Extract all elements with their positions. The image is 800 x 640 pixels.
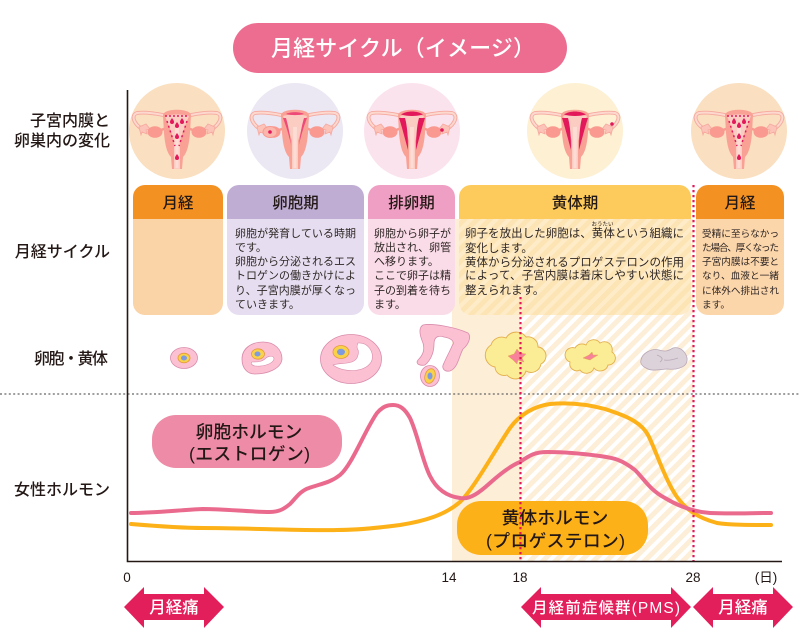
arrow: menstrual pain, end: 月経痛 [718,598,768,617]
red dotted marker: day 28 [692,185,695,561]
hormone label: progesterone: (プロゲステロン) [486,531,625,551]
panel: luteal phase: 整えられます。 [465,283,544,297]
panel: luteal phase: 卵子を放出した卵胞は、黄体という組織に [465,226,684,240]
panel: menstruation, end of cycle: 月経 [724,194,756,212]
panel: ovulation: ます。 [374,298,406,311]
hormone label: estrogen: 卵胞ホルモン [196,422,302,442]
axis labels: days: 18 [512,570,528,585]
panel: luteal phase: 変化します。 [465,242,533,255]
panel: menstruation, end of cycle: ます。 [702,299,730,311]
panel: luteal phase: 黄体から分泌されるプロゲステロンの作用 [465,255,684,269]
panel: follicular phase: トロゲンの働きかけによ [235,269,356,282]
icon: corpus albicans [641,348,687,370]
arrow: menstrual pain, start: 月経痛 [149,598,199,617]
panel: ovulation: へ移ります。 [374,254,439,268]
panel: luteal phase: 黄体期 [552,194,598,212]
icon: uterus, follicular phase [247,83,343,179]
row label: uterus and ovary changes: 卵巣内の変化 [14,132,110,150]
axis labels: days: (日) [755,570,777,585]
title: 月経サイクル（イメージ） [271,36,535,61]
hormone label: estrogen: (エストロゲン) [189,444,310,464]
panel: ovulation: 子の到着を待ち [374,283,451,297]
arrow: menstrual pain, start [124,587,224,628]
row label: menstrual cycle: 月経サイクル [15,243,110,261]
red dotted marker: day 18 [519,297,522,561]
panel: menstruation, end of cycle [696,185,784,315]
title [233,23,567,73]
panel: follicular phase: 卵胞期 [272,194,319,212]
panel: ovulation: 排卵期 [388,194,435,212]
panel: menstruation, end of cycle: に体外へ排出され [702,284,779,297]
icon: uterus, menstruation [129,83,225,179]
icon: corpus luteum, shrinking [565,340,615,373]
row label: female hormones: 女性ホルモン [14,481,110,499]
grey dotted separator [0,393,800,395]
icon: ovulating follicle [417,324,470,386]
hormone label: progesterone [457,501,648,555]
panel: follicular phase: り、子宮内膜が厚くなっ [235,283,356,297]
panel: menstruation [133,185,223,315]
chart axes [128,90,782,562]
panel: ovulation [368,185,455,315]
shaded luteal background band [452,219,693,561]
panel: menstruation, end of cycle: なり、血液と一緒 [702,269,779,282]
axis labels: days: 14 [441,570,457,585]
panel: luteal phase: おうたい [591,221,614,228]
line chart: estrogen curve [131,405,771,513]
hormone label: estrogen [152,415,342,468]
row label: follicle and corpus luteum: 卵胞・黄体 [34,350,108,368]
panel: menstruation, end of cycle: た場合、厚くなった [702,241,779,254]
icon: uterus, ovulation [364,83,460,179]
row label: uterus and ovary changes: 子宮内膜と [30,112,110,130]
panel: menstruation, end of cycle: 受精に至らなかっ [702,227,779,240]
panel: luteal phase: によって、子宮内膜は着床しやすい状態に [465,268,684,282]
icon: mature follicle [320,334,382,384]
panel: follicular phase: 卵胞から分泌されるエス [235,254,356,268]
row label: uterus and ovary changes [14,112,110,150]
icon: uterus, luteal phase [527,83,623,179]
icon: growing follicle [242,342,282,374]
panel: luteal phase [459,185,691,315]
panel: follicular phase: 卵胞が発育している時期 [235,226,356,240]
hormone label: progesterone: 黄体ホルモン [502,508,608,528]
icon: uterus, menstruation again [691,83,787,179]
panel: follicular phase: ていきます。 [235,298,300,311]
axis labels: days: 0 [123,570,131,585]
panel: ovulation: 放出され、卵管 [374,240,451,254]
panel: ovulation: 卵胞から卵子が [374,226,451,240]
icon: corpus luteum, large [485,332,546,379]
arrow: premenstrual syndrome: 月経前症候群(PMS) [532,599,680,617]
arrow: menstrual pain, end [693,587,793,628]
icon: small follicle [170,348,198,368]
axis labels: days: 28 [685,570,701,585]
panel: menstruation, end of cycle: 子宮内膜は不要と [702,255,779,268]
panel: follicular phase [227,185,364,315]
line chart: progesterone curve [131,403,771,530]
panel: follicular phase: です。 [235,241,267,254]
axis labels: days [123,570,777,585]
arrow: premenstrual syndrome [521,587,691,628]
panel: menstruation: 月経 [162,194,194,212]
panel: ovulation: ここで卵子は精 [374,268,451,282]
